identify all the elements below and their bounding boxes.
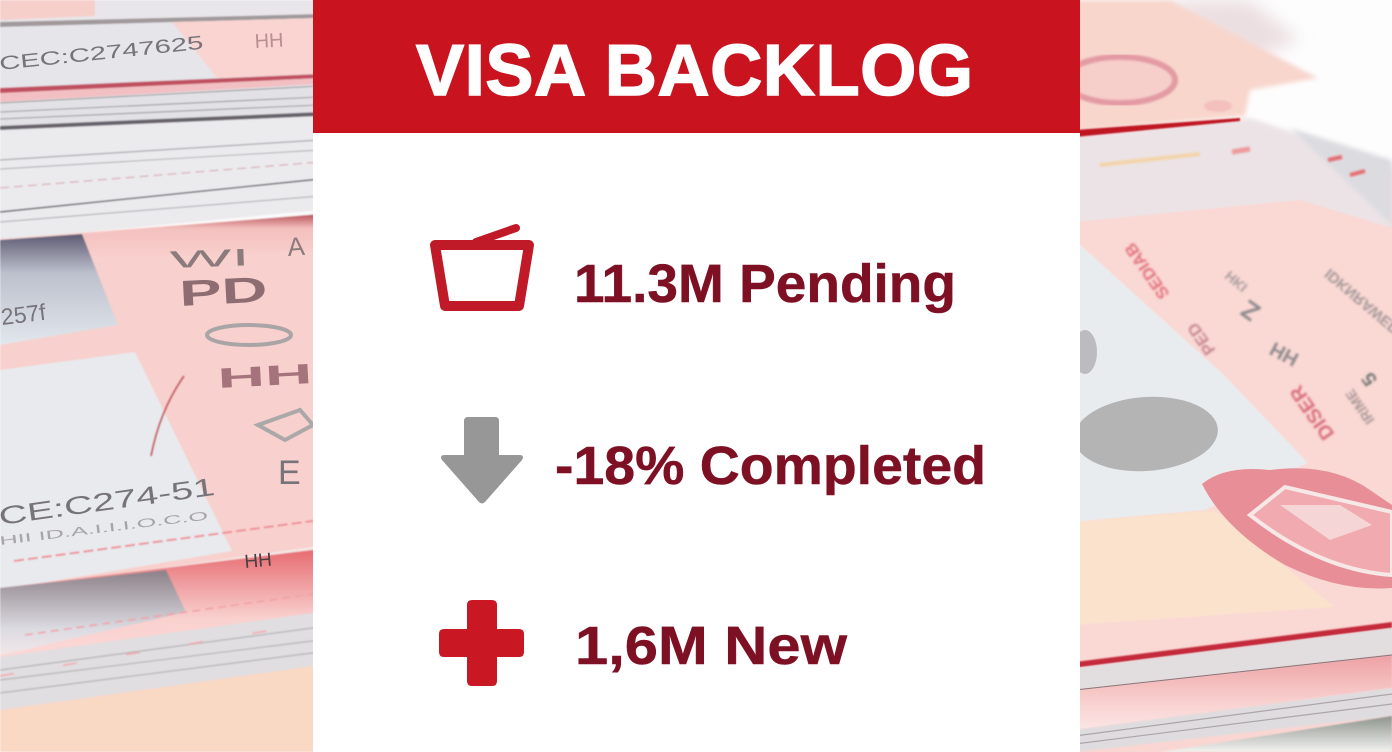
background photo: right passport stack — [1065, 0, 1392, 752]
background text: left passport prints: CE:C274-51 — [0, 473, 217, 531]
icon: down arrow — [441, 417, 523, 504]
background text: left passport prints: HH — [244, 550, 273, 573]
header banner — [313, 0, 1080, 133]
panel: central white card — [313, 0, 1080, 752]
title: VISA BACKLOG — [416, 31, 973, 111]
row: completed — [441, 417, 986, 504]
background photo: left passport stack — [0, 0, 320, 752]
stat: 11.3M Pending: 11.3M Pending — [574, 254, 956, 314]
background text: left passport prints: PD — [178, 268, 268, 314]
icon: plus — [439, 600, 524, 686]
background text: left passport prints: 257f — [0, 299, 48, 330]
background text: right passport prints: Z — [1235, 294, 1265, 328]
background text: left passport prints — [0, 30, 313, 573]
icon: basket — [435, 228, 529, 306]
background text: right passport prints: DISER — [1286, 381, 1339, 444]
row: new — [439, 600, 848, 686]
stat: 1,6M New: 1,6M New — [575, 616, 848, 676]
background text: left passport prints: A — [286, 231, 306, 262]
background text: right passport prints: IRIME — [1342, 386, 1377, 427]
background text: left passport prints: HH — [254, 30, 284, 53]
background text: left passport prints: CEC:C2747625 — [0, 33, 204, 75]
background text: right passport prints: PED — [1184, 319, 1219, 359]
background text: right passport prints: HKI — [1222, 268, 1250, 295]
stat: -18% Completed: -18% Completed — [555, 436, 986, 496]
background text: left passport prints: E — [278, 454, 301, 492]
background text: right passport prints: SEDIAB — [1121, 239, 1173, 303]
background text: right passport prints — [1100, 149, 1392, 444]
background text: left passport prints: HH — [217, 358, 313, 394]
background text: left passport prints: HII ID.A.I.I.I.O.C.O — [0, 508, 209, 548]
background text: right passport prints: 5 — [1358, 368, 1382, 390]
row: pending — [435, 228, 956, 314]
background text: right passport prints: HH — [1267, 337, 1302, 370]
background text: left passport prints: WI — [169, 244, 250, 274]
